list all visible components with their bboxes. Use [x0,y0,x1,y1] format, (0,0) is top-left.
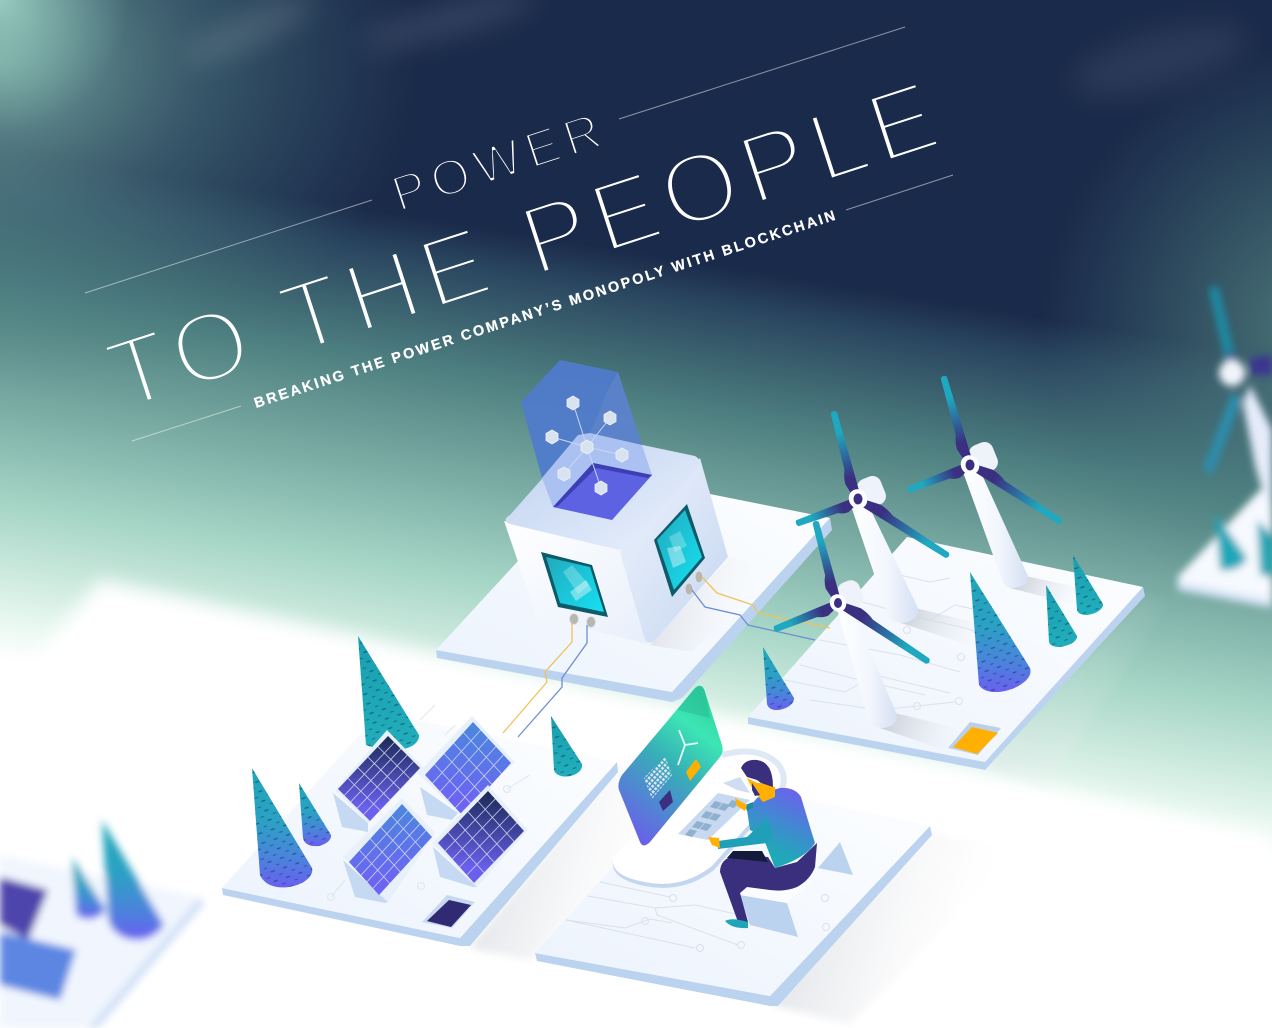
cones on solar platform [252,636,582,887]
wind turbine 1 [795,410,953,623]
solar circuit traces [328,705,530,900]
desk [613,750,784,888]
panel 3 [343,798,435,903]
screen [618,686,723,846]
title: POWER: POWER [385,102,608,222]
seat [740,842,853,937]
hologram cube [521,360,652,520]
sockets [570,571,703,628]
workstation [613,686,853,937]
floor shadows [470,596,1170,1024]
top face [506,434,700,550]
blurred turbine right [1178,286,1272,608]
platform: wind farm [748,537,1145,770]
right face [620,458,728,642]
wires [503,577,830,737]
person [708,760,817,928]
panel 2 [418,716,515,820]
platform: workstation [535,775,932,1006]
platform: solar [222,712,618,946]
title group [85,27,953,441]
window: left [541,552,608,617]
platform: blockchain house [436,472,832,702]
keypad [678,793,750,840]
panel 4 [432,785,528,887]
wind turbine 2 [906,375,1066,588]
panel 1 [333,730,423,832]
turbine shadows [880,576,1090,752]
cones on wind platform [763,555,1103,710]
circuit traces [566,882,830,952]
title: TO THE PEOPLE: TO THE PEOPLE [94,59,950,431]
house shadow [650,557,775,652]
rule lines [85,27,953,441]
circuit traces [785,575,1000,710]
wind turbine 3 [773,520,934,728]
blockchain house [504,360,728,644]
solar panels [333,716,528,903]
white floor [0,580,1272,1028]
navy pad [422,895,475,928]
blurred platform bottom left [0,820,204,1028]
left face [504,521,650,644]
window: right [654,504,705,597]
gold pad [948,722,1001,755]
subtitle: BREAKING THE POWER COMPANY’S MONOPOLY WITH BLOCKCHAIN [252,208,837,412]
